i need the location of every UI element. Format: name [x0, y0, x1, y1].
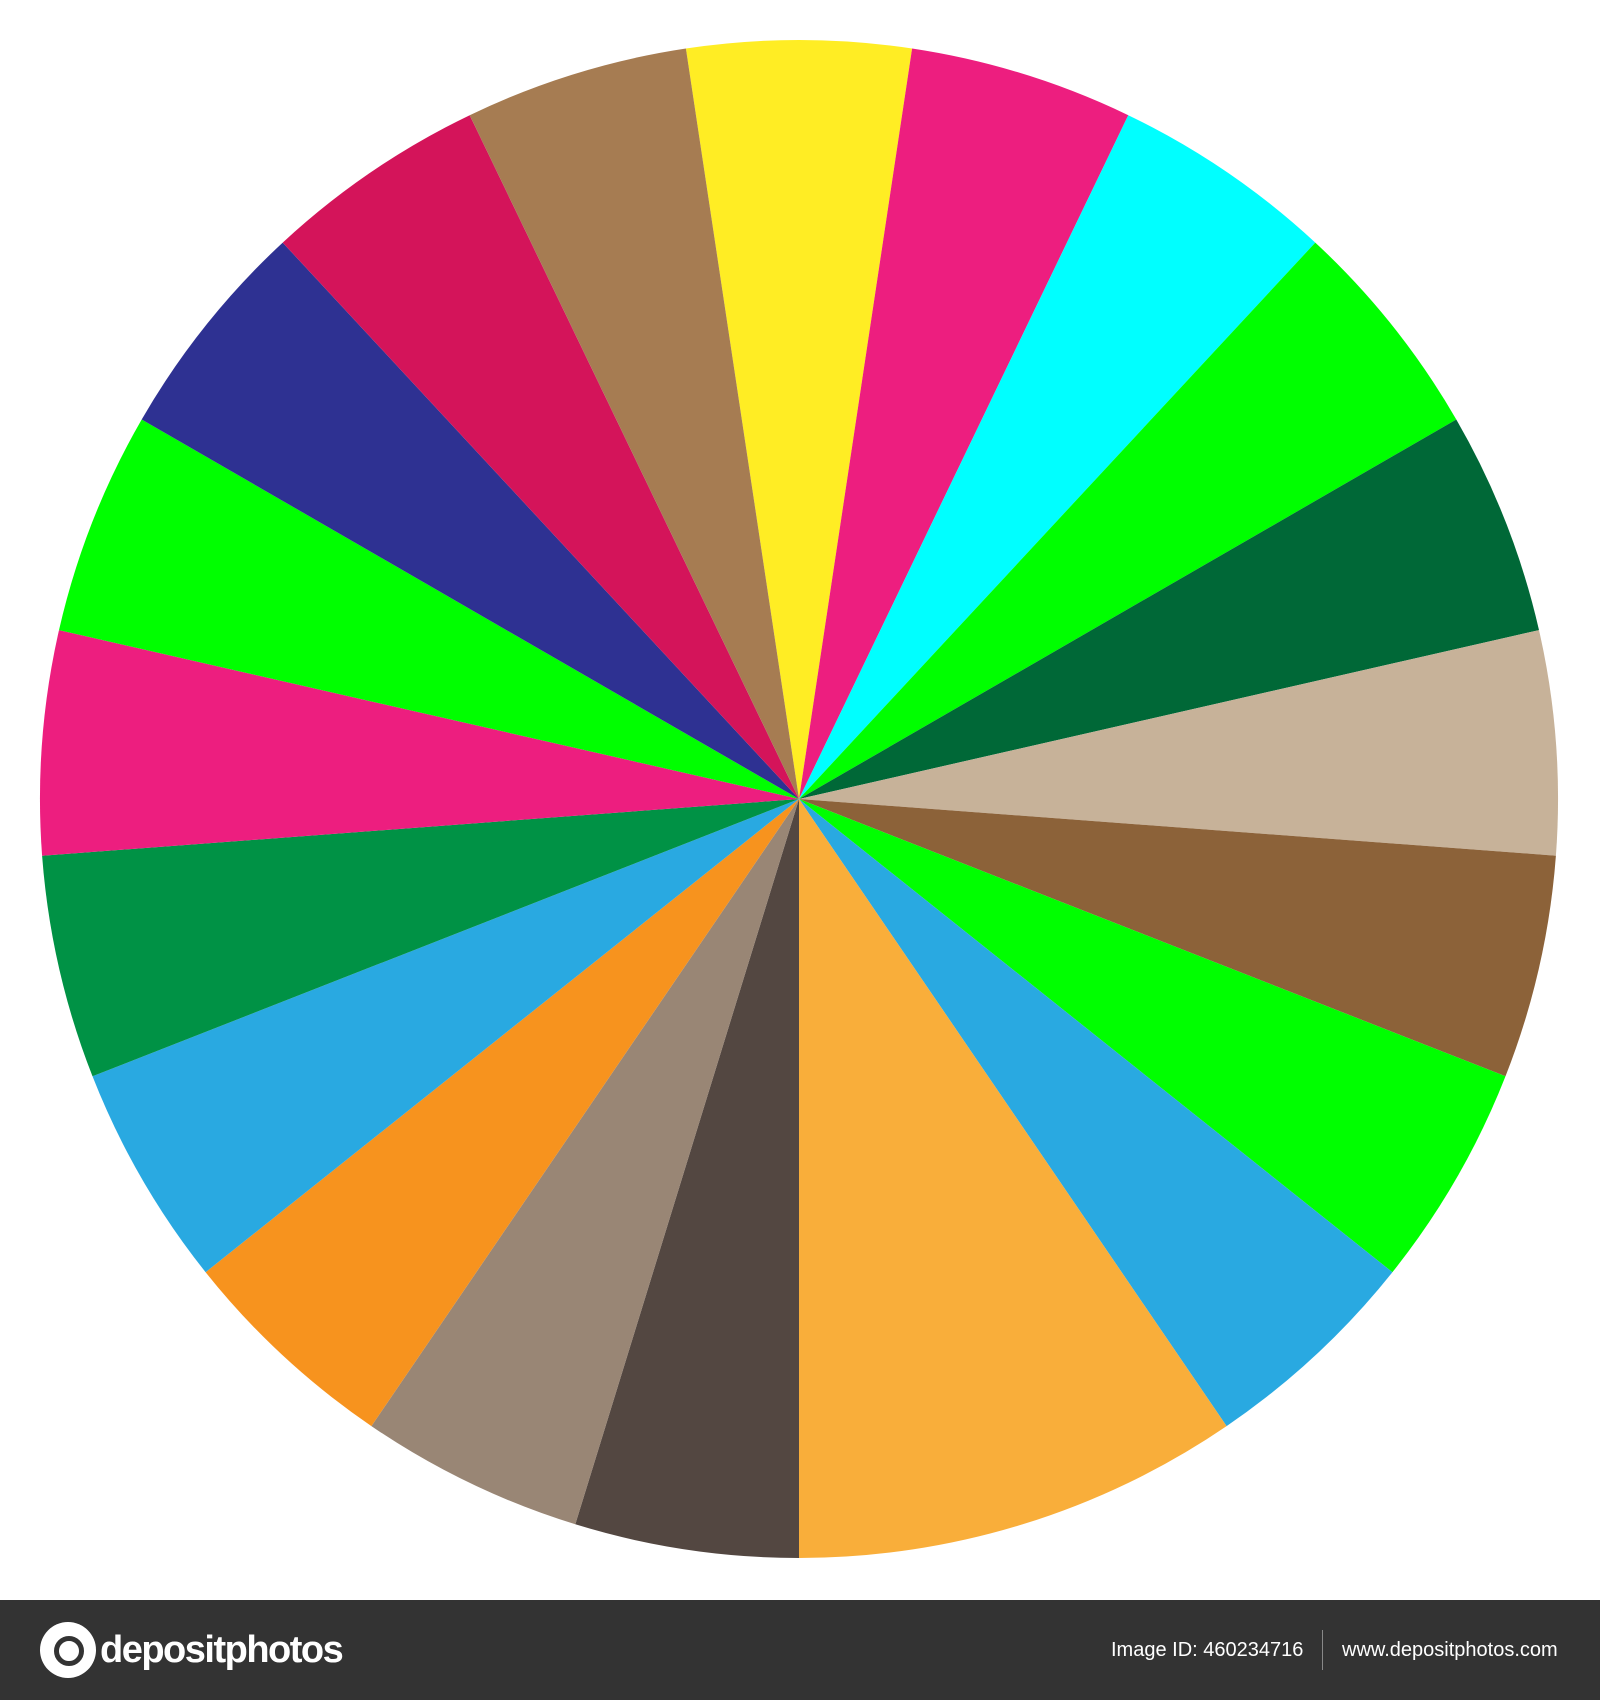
icon: camera circle — [40, 1622, 96, 1678]
logo — [40, 1622, 342, 1678]
image id: Image ID: 460234716 — [1111, 1639, 1303, 1661]
footer bar — [0, 1600, 1600, 1700]
website: www.depositphotos.com — [1342, 1639, 1558, 1661]
logo text: depositphotos — [100, 1629, 342, 1671]
